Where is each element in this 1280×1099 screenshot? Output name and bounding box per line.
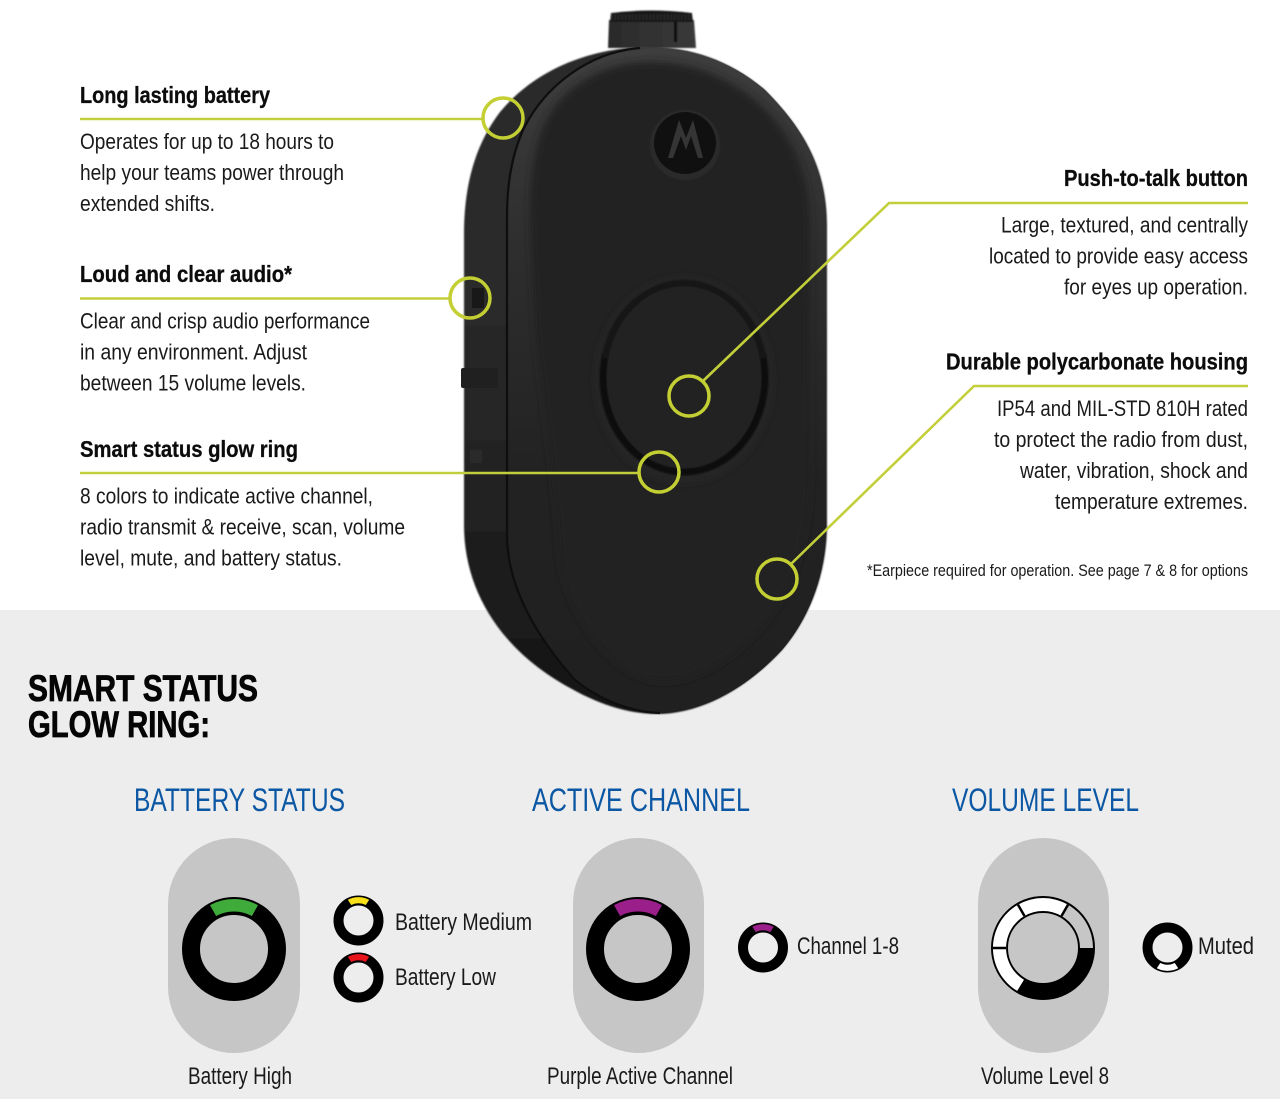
label: Battery Medium	[395, 909, 532, 936]
callout line	[791, 386, 1248, 564]
callout line	[703, 203, 1248, 381]
callout line	[80, 297, 450, 300]
description: radio transmit & receive, scan, volume	[80, 514, 405, 540]
pill with volume ring	[978, 838, 1109, 1053]
device: radio	[461, 10, 827, 714]
device logo	[650, 110, 720, 180]
device front face	[530, 62, 810, 681]
callout: smart status glow ring	[80, 436, 679, 570]
callout ring	[669, 376, 709, 416]
heading: Loud and clear audio*	[80, 261, 292, 287]
description: in any environment. Adjust	[80, 340, 308, 364]
description: for eyes up operation.	[1064, 274, 1248, 300]
pill with green ring	[168, 838, 300, 1053]
heading: VOLUME LEVEL	[952, 782, 1139, 818]
description: Clear and crisp audio performance	[80, 308, 370, 334]
panel: battery status	[134, 782, 532, 1090]
section title: GLOW RING:	[28, 703, 210, 745]
callout ring	[757, 559, 797, 599]
callout line	[80, 472, 639, 474]
description: Operates for up to 18 hours to	[80, 129, 334, 154]
callout ring	[483, 98, 523, 138]
section title	[28, 667, 258, 745]
label: Muted	[1198, 933, 1254, 960]
device front rim	[507, 48, 826, 713]
device knob	[608, 10, 696, 48]
callout: push-to-talk button	[669, 165, 1249, 416]
description: temperature extremes.	[1055, 489, 1248, 514]
callout line	[80, 118, 484, 120]
label: Purple Active Channel	[547, 1063, 733, 1090]
label: Battery High	[188, 1063, 292, 1090]
heading: Push-to-talk button	[1064, 165, 1248, 191]
icon: battery low ring	[338, 954, 378, 998]
label: Battery Low	[395, 964, 497, 991]
section title: SMART STATUS	[28, 667, 258, 709]
description	[80, 129, 344, 216]
pill with purple ring	[573, 838, 704, 1053]
callout: long lasting battery	[80, 82, 523, 216]
callout ring	[639, 452, 679, 492]
description: to protect the radio from dust,	[994, 427, 1248, 452]
description	[80, 308, 370, 396]
callout: durable polycarbonate housing	[757, 348, 1248, 599]
heading: Long lasting battery	[80, 82, 270, 108]
panel: active channel	[532, 782, 899, 1090]
description: water, vibration, shock and	[1019, 458, 1248, 483]
device side buttons	[461, 288, 498, 463]
description: extended shifts.	[80, 191, 215, 216]
callout: loud and clear audio	[80, 261, 490, 396]
description	[994, 396, 1248, 514]
icon: battery medium ring	[338, 897, 378, 940]
device push-to-talk button	[596, 278, 772, 482]
device body	[464, 47, 827, 714]
description: 8 colors to indicate active channel,	[80, 484, 373, 508]
description: help your teams power through	[80, 160, 344, 185]
heading: ACTIVE CHANNEL	[532, 782, 750, 818]
icon: muted ring	[1148, 928, 1188, 971]
description	[80, 484, 405, 570]
description: level, mute, and battery status.	[80, 546, 342, 570]
heading: BATTERY STATUS	[134, 782, 345, 818]
device rim seam	[507, 48, 660, 713]
label: Channel 1-8	[797, 933, 899, 960]
description: between 15 volume levels.	[80, 370, 306, 396]
panel: grey lower background	[0, 610, 1280, 1099]
callout ring	[450, 278, 490, 318]
icon: channel ring	[743, 924, 783, 968]
description	[989, 212, 1249, 300]
label: Volume Level 8	[981, 1063, 1109, 1090]
heading: Smart status glow ring	[80, 436, 298, 462]
panel: volume level	[952, 782, 1254, 1090]
